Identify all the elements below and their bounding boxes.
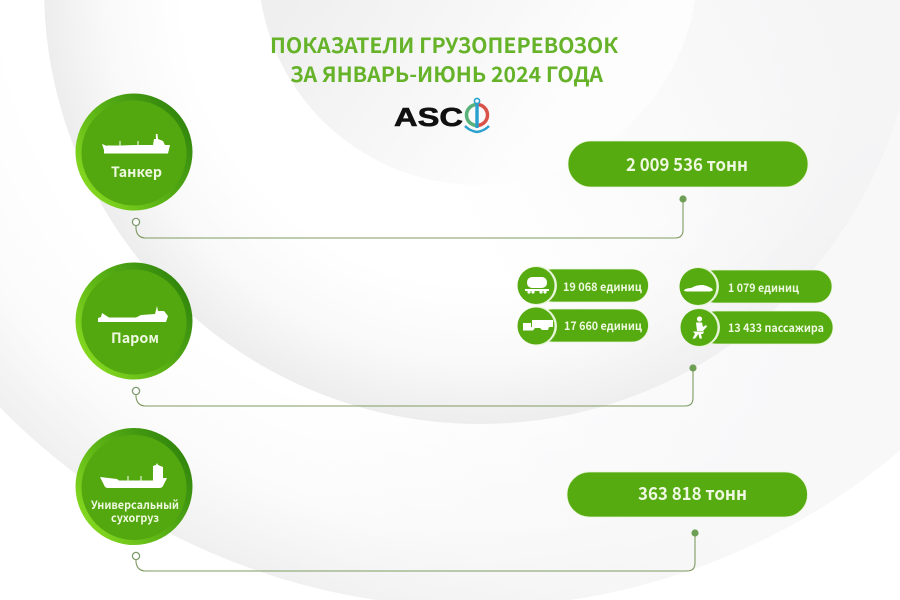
value pill [567, 472, 808, 517]
stat: 1 079 единиц: 1 079 единиц [728, 280, 799, 296]
panel: ferry row [76, 262, 833, 406]
stat: 13 433 пассажира [680, 308, 833, 347]
icon: seated passenger [692, 316, 707, 338]
badge: Универсальный сухогруз: сухогруз [111, 510, 159, 526]
stat: 1 079 единиц [680, 267, 832, 306]
icon: tank wagon [525, 277, 549, 294]
title: ПОКАЗАТЕЛИ ГРУЗОПЕРЕВОЗОК [270, 30, 618, 60]
value pill: 2 009 536 тонн [626, 151, 748, 177]
connector [136, 199, 683, 238]
icon: truck [523, 320, 553, 330]
stat: 17 660 единиц: 17 660 единиц [564, 318, 642, 334]
badge: Универсальный сухогруз: Универсальный [91, 497, 179, 513]
badge: Паром [76, 262, 192, 380]
connector [136, 368, 693, 406]
connector [136, 533, 695, 571]
logo: ASCO: ASC [394, 102, 463, 132]
panel: tanker row [76, 94, 808, 238]
badge: Паром: Паром [111, 328, 159, 348]
panel: dry cargo row [76, 428, 808, 571]
stat: 19 068 единиц [518, 266, 648, 305]
badge: Танкер [76, 94, 192, 210]
title: ЗА ЯНВАРЬ-ИЮНЬ 2024 ГОДА [290, 59, 604, 89]
icon: ferry ship [98, 306, 168, 322]
value pill: 363 818 тонн [638, 480, 747, 506]
logo: ASCO [394, 98, 489, 132]
title [270, 30, 618, 89]
icon: car [684, 285, 713, 292]
stat: 19 068 единиц: 19 068 единиц [563, 279, 642, 295]
badge: Танкер: Танкер [111, 162, 162, 182]
icon: tanker ship [102, 134, 170, 154]
stat: 13 433 пассажира: 13 433 пассажира [728, 320, 824, 336]
stat: 17 660 единиц [518, 306, 648, 346]
badge: Универсальный сухогруз [76, 428, 192, 545]
value pill [568, 141, 808, 187]
icon: cargo ship [100, 463, 167, 488]
